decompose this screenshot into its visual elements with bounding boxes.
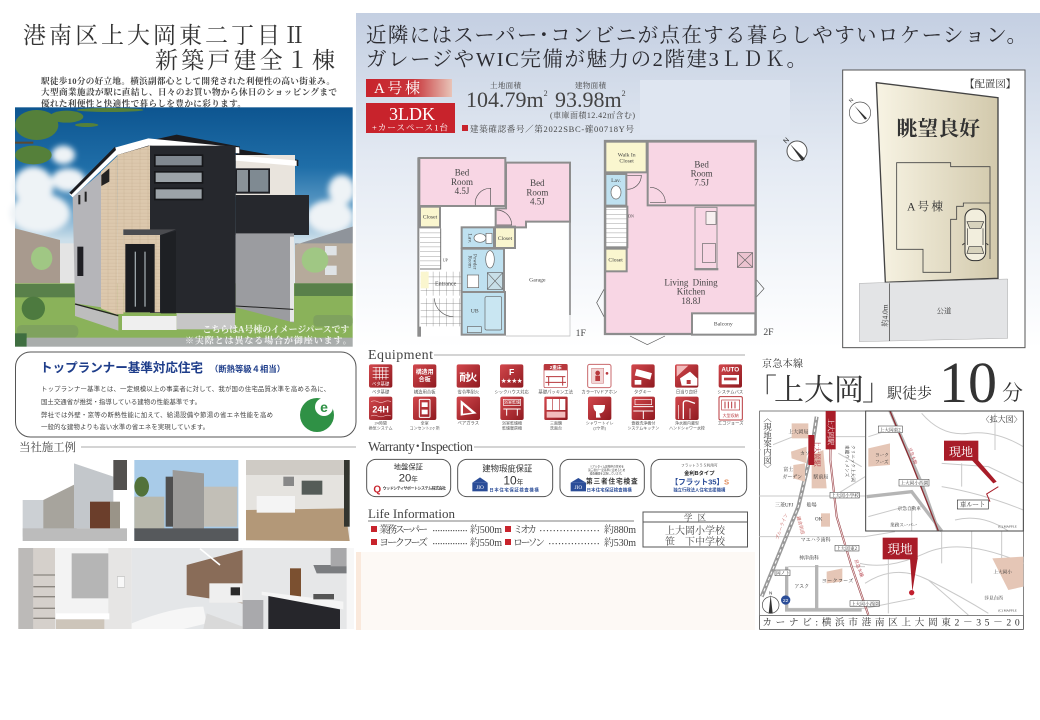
photo gallery [18,460,354,629]
intro text block: 駅徒歩10分の好立地。横浜副都心として開発された利便性の高い街並み。 [40,75,335,86]
icon: sick house: シックハウス対応 [494,388,530,395]
badge: third party inspection [560,459,644,497]
icon: map compass: N [769,590,772,595]
floor plan 1F: UB [471,308,479,314]
map panel [760,411,1023,629]
panel: blue right background [356,13,1040,630]
heading: equipment: Equipment [368,348,433,363]
life info list: ヨークフーズ [379,537,428,549]
house exterior rendering [10,107,355,347]
site marker: inset: 現地 [949,444,973,459]
dark front [150,146,236,313]
site label: 【配置図】 [964,79,1016,91]
map labels: ヨーク [875,453,889,459]
callout body text: トップランナー基準とは、一定規模以上の事業者に対して、我が国の住宅品質水準を高める為に、 [41,384,330,393]
title [23,23,335,73]
map labels: カゾ [800,450,810,457]
photo: exterior 2 [134,460,238,541]
property areas: 土地面積 [490,80,522,90]
station access heading [747,350,1023,415]
life info list: ミオカ [513,524,537,536]
floor plan 1F: Closet [498,236,513,242]
floor label 2F: 2F [763,327,774,338]
station access heading: 駅徒歩 [886,384,932,402]
icon: structural plywood: 構造用 [416,368,434,376]
badge: flat 35: 【フラット35】 [671,477,724,486]
station name tags: 上大岡東2 [836,545,858,552]
main roads [787,411,942,610]
icon: pair glass: ペアガラス [458,419,479,426]
icon: sunlight [675,364,698,395]
map labels: フーズ [875,458,889,465]
image disclaimer [185,324,352,346]
photo: kitchen [243,548,354,629]
left wall [73,172,102,307]
badge: third party inspection: 検査機関を実施しています。 [590,472,624,476]
badge: ground guarantee: ウッドシティサポートシステム株式会社 [383,484,446,490]
icon: 24h ventilation [369,397,393,431]
floor plan 1F: Entrance [435,282,457,288]
floor plan 1F: Room [451,177,473,187]
property areas: 2 [544,89,548,98]
badge: third party inspection: 日本住宅保証検査機構 [587,486,632,493]
image disclaimer: ※実際とは異なる場合が御座います。 [185,335,352,346]
badge: third party inspection: リアルタイム建物中の住宅を [589,464,624,468]
property areas: (車庫面積12.42㎡含む) [550,110,635,120]
icon: structural plywood: 構造用合板 [414,388,436,395]
icon: outlets [410,397,440,431]
map labels: ヨークフーズ [822,578,853,585]
icon: 24h ventilation: 換気システム [369,425,393,431]
badge: defect warranty: JIO [476,485,484,491]
label: building A [366,79,452,97]
badge: flat 35: S [724,477,729,486]
station name tags [775,426,929,607]
floor plan 1F: UP [443,257,449,262]
floor plan 2F: Balcony [714,322,733,328]
icon: base packing: 基礎パッキン工法 [538,388,574,395]
lawn [15,283,353,338]
map labels: (C) MAPPLE [998,524,1017,528]
icon: system bath: AUTO [721,367,739,374]
site marker: main [883,538,918,595]
panel: top runner callout [16,352,356,437]
life info list: ･･････････････ [432,527,468,535]
map labels: 神津歯科 [799,554,819,561]
image disclaimer: こちらはA号棟のイメージパースです [203,324,349,335]
icon: north compass [848,97,871,123]
icon: outlets: 全室 [421,419,429,425]
floor plan 1F [418,157,586,339]
station access heading: 分 [1002,381,1023,405]
map labels: 東龍ウィメンズ [844,445,851,478]
floor plan 1F: 4.5J [455,186,470,196]
site lot [876,83,998,282]
life info list: 約530m [604,536,636,549]
badge: flat 35: フラット３５Ｓ利用可 [681,463,718,468]
map labels: 富士 [783,466,793,473]
icon: sunlight: 日当り良好 [676,388,698,395]
callout body text: 国土交通省が推奨・指導している建物の性能基準です。 [41,397,201,406]
map labels: 三菱UFJ [775,502,793,509]
map labels: クリニック上大岡 [850,445,857,482]
badge: ground guarantee: 地盤保証 [394,462,424,471]
map labels: current map and enlarged map: 〈現地案内図〉 [762,414,772,473]
title: 港南区上大岡東二丁目Ⅱ [23,23,306,48]
site marker: inset [944,441,998,509]
map labels: 莎見台西 [984,595,1003,602]
map labels: current map and enlarged map: 〈拡大図〉 [982,414,1022,424]
icon: sick house: ★★★★ [501,379,523,385]
photo: vanity [18,548,132,629]
label: 3LDK: +カースペース1台 [372,122,448,132]
icon: base packing [538,364,574,395]
map labels: 鎌倉街道 [795,515,806,536]
map labels: ブルーライン [774,512,790,541]
map labels: マエハラ歯科 [801,537,831,544]
badge: third party inspection: JIO [574,485,582,491]
floor plan 1F: Lav. [466,233,472,244]
inset map frame [866,411,1023,531]
compass: floor plan: N [782,137,791,145]
map labels: アスク [794,584,809,590]
main heading: ガレージやWIC完備が魅力の2階建3ＬＤＫ。 [366,47,807,71]
map labels: 船場 [807,502,817,509]
map labels: 上大岡局 [788,428,808,435]
icon: color TV intercom [581,364,617,395]
icon: bathroom dryer: 乾燥暖房機 [502,425,522,431]
floor plan 2F [597,141,774,345]
property areas: 93.98m [555,87,622,112]
equipment icons [369,364,744,431]
life information [368,506,636,549]
property areas: 104.79m [466,87,544,112]
map labels: 上大岡小 [993,568,1012,575]
life info list: ･･････････････ [432,540,468,548]
life info list: 約880m [604,523,636,536]
callout body text: 一般的な建物よりも高い水準の省エネを実現しています。 [41,422,209,431]
map labels: current map and enlarged map [761,413,1022,478]
map labels: 京急自動車 [898,505,921,512]
icon: shower toilet [586,397,614,431]
icon: hand shower [669,397,705,431]
photo: exterior 1 [23,460,127,541]
label: 3LDK: 3LDK [389,104,435,124]
floor plan 2F: Bed [694,159,709,169]
rooms [418,157,570,337]
rooms [605,142,755,335]
icon: car [962,209,988,261]
compass: floor plan [782,137,807,161]
station access heading: 上大岡 [774,374,864,407]
floor plan 2F: DN [628,214,634,219]
icon: three-sided mirror [544,397,568,431]
station access heading: 」 [862,374,892,407]
site marker: inset: 車ルート [960,500,985,509]
life info list: ･･････････････････ [539,527,600,535]
icon: structural plywood [413,364,436,395]
map labels [774,418,1017,613]
station access heading: 10 [939,350,997,415]
car navigation address: カーナビ:横浜市港南区上大岡東2－35－20 [762,617,1020,629]
life info list: 約550m [470,536,502,549]
icon: system bath: システムバス [717,389,743,395]
map labels: 業務スーパー [890,522,918,529]
icon: shower toilet: シャワートイレ [586,420,614,425]
map labels: 上大岡駅 [826,418,835,445]
school district table: 学 区 [684,512,707,522]
icon: three-sided mirror: 洗面台 [550,425,562,431]
floor plan 1F: Closet [423,214,438,220]
railway [830,413,868,615]
floor plan 2F: Kitchen [677,287,706,297]
photo: bathroom [132,548,243,629]
icon: bathroom dryer: 浴室乾燥機 [502,419,522,425]
neighbours [15,228,60,283]
badge: ground guarantee: 20年 [399,472,418,484]
site lot: A号棟 [907,199,943,213]
badge: ground guarantee: Q [373,485,381,496]
icon: bathroom dryer: 浴室乾燥 [504,399,520,405]
floor plan 1F: 4.5J [530,197,545,207]
floor plan 2F: Room [691,169,713,179]
icon: color TV intercom: カラーTVドアホン [581,389,617,395]
station name tags: 上大岡東2 [880,426,901,433]
label: building A: A号棟 [374,80,420,97]
floor plan 2F: Closet [619,158,634,164]
icon: fire resistance: 耐火 [459,371,477,384]
main heading: 近隣にはスーパー･コンビニが点在する暮らしやすいロケーション。 [366,24,1027,47]
intro text block: 優れた利便性と快適性で暮らしを豊かに彩ります。 [41,98,246,108]
icon: green energy mark: e [320,399,328,415]
icon: beta foundation [369,364,392,395]
life info list [371,523,636,549]
station name tags: 上大岡小西園 [900,480,929,487]
public road: 約4.0m [881,304,890,327]
floor plan 2F: Walk In [618,152,636,158]
floor plan 2F: 7.5J [694,178,710,188]
icon: shower toilet: (2ケ所) [593,425,607,431]
floor plan 2F: Closet [608,257,623,263]
badge: flat 35: 金利Bタイプ [684,469,715,477]
badge: third party inspection: 第三者住宅検査 [586,476,638,485]
icon: system bath [717,364,743,395]
badge: defect warranty: 建物瑕疵保証 [482,463,533,473]
station access heading: 「 [747,374,777,407]
label: 3LDK [366,103,455,133]
callout heading [40,360,285,375]
site lot: 眺望良好 [897,117,980,141]
upper right wing [236,155,295,197]
icon: beta foundation: ベタ基礎 [372,380,390,387]
life info list: 約500m [470,523,502,536]
floor plan 1F: Bed [530,178,545,188]
life information: Life Information [368,506,456,521]
callout heading: （断熱等級４相当） [210,364,285,374]
floor plan 1F: Garage [529,278,546,284]
icon: tag key [631,364,655,395]
public road: 公道 [937,306,952,315]
map labels: 京急本線 [852,558,866,579]
floor plan 2F: Lav. [611,178,622,184]
heading: construction examples: 当社施工例 [19,440,76,454]
icon: eco jozu: エコジョーズ [718,419,744,426]
icon: fire resistance [457,364,480,395]
title: 新築戸建全１棟 [155,48,335,73]
badge: ground guarantee [367,459,451,497]
callout body text: 弊社では外壁・窓等の断熱性能に加えて、給湯設備や節湯の省エネ性能を高め [41,410,273,419]
station name tags: 上大岡小学校 [831,492,859,499]
icon: bathroom dryer [500,397,524,431]
map labels: 上大岡駅 [813,440,822,467]
heading: warranty and inspection: Warranty･Inspection [368,439,473,454]
map labels: (C) MAPPLE [998,609,1017,613]
badge: flat 35 [651,459,747,497]
badge: defect warranty: 日本住宅保証検査機構 [489,486,539,493]
icon: eco jozu: 大型収納 [723,412,739,418]
floor plan 1F: Bed [455,167,470,177]
icon: sick house: F [509,367,514,377]
school district table [643,512,748,548]
public road [859,279,1008,342]
icon: pair glass [457,397,480,426]
icon: fire resistance: 省令準耐火 [458,388,480,395]
property areas: 建物面積 [575,80,606,90]
tree [15,108,143,164]
confirmation number: 建築確認番号／第2022SBC-確00718Y号 [470,124,634,134]
school district table: 上大岡小学校 [665,524,726,537]
icon: structural plywood: 合板 [419,376,431,384]
icon: north compass: N [848,97,855,104]
property areas: 2 [622,89,626,98]
map labels: OK [815,518,823,523]
main heading [366,24,1027,71]
map blocks [791,423,1023,590]
station name tags: 岡ノト [776,570,790,577]
badge: defect warranty: 10年 [503,474,524,488]
icon: eco jozu [718,397,744,426]
life info list: ローソン [513,537,545,549]
floor plan 1F: Room [466,256,471,268]
floor plan 2F: Living Dining [664,278,718,288]
panel: site layout [843,70,1025,348]
property areas [462,80,635,134]
icon: 24h ventilation: 24時間 [374,419,387,425]
road network [760,413,1023,615]
site marker: main: 現地 [887,542,913,557]
callout body text [41,384,330,431]
roof [115,135,240,155]
map labels: ガーデン [782,473,802,480]
badge: flat 35: 独立行政法人住宅支援機構 [673,487,726,494]
warranty badges [367,459,747,497]
intro text block: 大型商業施設が駅に直結し、日々のお買い物から休日のショッピングまで [41,86,337,97]
floor plan 1F: Room [526,188,548,198]
intro text block [40,75,337,108]
life info list: 業務スーパー [379,523,428,536]
badge: defect warranty [458,459,553,497]
porch [123,229,176,235]
floor label 1F: 1F [576,328,586,339]
icon: system kitchen [627,397,659,431]
icon: outlets: コンセント2ヶ所 [410,425,440,431]
floor plan 1F: Powder [471,254,476,270]
badge: third party inspection: 第三者が一定基準に定めるため [588,468,626,472]
icon: hand shower: ハンドシャワー水栓 [669,425,705,431]
icon: sick house [494,364,530,395]
life info list: ････････････････ [548,540,600,548]
school district table: 笹 下中学校 [665,535,726,548]
photo: living room [246,460,350,541]
icon: tag key: タグキー [634,388,651,395]
icon: green energy mark [300,398,334,432]
station name tags: 上大岡小西園 [851,600,879,607]
station access heading: 京急本線 [762,357,803,370]
icon: map compass: 22 [783,598,789,604]
floor plan 2F: 18.8J [681,296,701,306]
callout heading: トップランナー基準対応住宅 [40,360,203,375]
icon: three-sided mirror: 三面鏡 [550,419,562,425]
icon: hand shower: 浄水器内蔵型 [675,419,699,425]
map labels: 京急本線 [906,447,919,466]
icon: system kitchen: 食器洗浄機付 [631,419,655,425]
icon: beta foundation: ベタ基礎 [372,388,390,395]
map labels: 駅前局 [812,473,828,480]
icon: base packing: 2重床 [550,364,562,371]
station bars [826,411,836,449]
icon: system kitchen: システムキッチン [627,425,659,431]
icon: map compass [762,590,790,613]
icon: 24h ventilation: 24H [372,405,389,415]
